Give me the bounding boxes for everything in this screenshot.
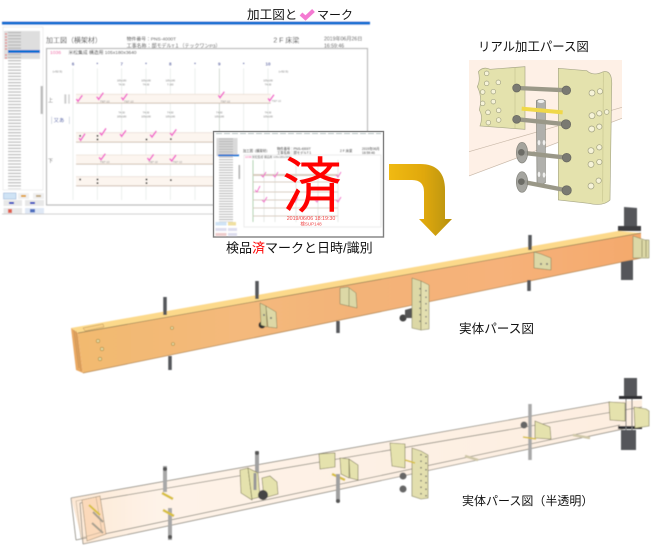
drawing header texts: 物件番号：PNS-4000T: [127, 35, 176, 42]
member drawing content: T4-30: [118, 84, 126, 87]
heading: processing drawing and check mark: [247, 8, 353, 22]
caption: inspected mark with date and ID: 検品済マークと日時/識別: [226, 240, 373, 256]
left bracket plate: [477, 67, 525, 129]
bracket at post 1: [258, 303, 277, 328]
drawing header texts: 2019年06月26日: [324, 35, 362, 43]
long bracket with bolts: [400, 278, 429, 330]
panel: inspected drawing screenshot with red stamp: 米松集成 構造用 105x180x3640: [252, 155, 292, 159]
beam front face: [78, 233, 641, 373]
member drawing content: T90*-10: [221, 99, 231, 103]
member drawing content: 米松集成 構造用 105x180x3640: [68, 49, 137, 56]
member drawing content: 1036: [50, 50, 61, 56]
member drawing content: 上: [48, 97, 53, 104]
member drawing content: T90*-10: [100, 160, 110, 164]
panel: inspected drawing screenshot with red stamp: 加工図（横架材）: [243, 148, 269, 153]
panel: inspected drawing screenshot with red stamp: 16:59:46: [362, 151, 375, 155]
dark column stubs and end bracket: [618, 207, 649, 280]
panel: inspected drawing screenshot with red stamp: 2019年06月: [362, 146, 380, 151]
member drawing content: T4-30: [216, 111, 223, 114]
member drawing content: 又あ: [54, 117, 64, 124]
bracket holes: [480, 71, 609, 189]
right bracket plate: [558, 68, 612, 204]
end plate with pins: [76, 496, 106, 541]
tree list of members: [3, 27, 43, 190]
caption: translucent solid perspective: 実体パース図（半透明）: [462, 494, 593, 508]
caption: solid perspective: 実体パース図: [459, 321, 534, 336]
member drawing content: T4-30: [265, 111, 272, 114]
stamp: date and identifier: 2019/06/06 18:19:30: [287, 216, 335, 222]
stamp: red inspected character: 済: [282, 153, 342, 220]
member drawing content: T-100: [167, 84, 174, 87]
panel: solid perspective timber beam: [71, 207, 649, 373]
drawing header texts: [46, 35, 362, 49]
member drawing content: 下: [48, 158, 53, 164]
member drawing content: 6: [72, 62, 75, 67]
panel: inspected drawing screenshot with red stamp: 物件番号：PNS-4000T: [277, 146, 311, 151]
member drawing content: 105x180: [215, 115, 225, 118]
member drawing content: 105x180: [117, 115, 127, 118]
bolt heads and washers: [513, 84, 571, 195]
window title bar: [2, 22, 370, 25]
member drawing content: *: [194, 62, 196, 67]
heading: processing drawing and check mark: 加工図と: [247, 8, 297, 22]
member drawing content: (+52.5): [279, 70, 288, 74]
steel rods: [165, 235, 530, 370]
tool buttons: [4, 193, 44, 214]
panel: translucent perspective timber beam: [71, 378, 649, 544]
rod pair 1: [162, 466, 174, 540]
bolts: [517, 88, 567, 190]
member drawing content: *: [145, 62, 147, 67]
member drawing content: T4-30: [167, 111, 174, 114]
beam end laminations: [71, 328, 83, 373]
member drawing content: 8: [169, 62, 172, 67]
member drawing content: 7: [120, 62, 123, 67]
heading: processing drawing and check mark: マーク: [317, 8, 353, 22]
member drawing content: 9: [218, 62, 221, 67]
timber bands: [76, 94, 271, 186]
panel: inspected drawing screenshot with red stamp: 2 F 床梁: [340, 148, 353, 153]
panel: main processing drawing screenshot: [2, 21, 370, 214]
bracket near right: [534, 252, 551, 270]
member drawing content: [48, 49, 288, 200]
member drawing content: *: [96, 62, 98, 67]
member drawing content: 105x180: [166, 115, 176, 118]
drawing header texts: 16:59:46: [324, 43, 344, 49]
member drawing content: T4-30: [143, 111, 150, 114]
member drawing content: 105x180: [263, 80, 273, 83]
member drawing content: T4-30: [118, 111, 126, 114]
member drawing content: T90*-10: [272, 99, 282, 103]
caption: real processing perspective: リアル加工パース図: [478, 40, 589, 54]
end posts and brackets: [609, 378, 649, 450]
bracket group 3 long plate: [390, 443, 428, 499]
check marks: [76, 92, 274, 161]
drift pin holes: [96, 326, 174, 361]
beam top face: [71, 231, 641, 333]
drawing header texts: 工事名称：邸モデルT１（テックワンP3）: [127, 42, 221, 49]
drawing header texts: 加工図（横架材）: [46, 36, 102, 45]
member drawing content: 10: [265, 62, 271, 67]
window status line: [2, 213, 370, 215]
icon: pink check mark: [301, 10, 314, 18]
member drawing content: (+52.5): [53, 70, 62, 74]
drawing frame: [46, 48, 368, 205]
drawing header texts: 2 F 床梁: [273, 36, 299, 45]
panel: real processing perspective view: [469, 60, 622, 204]
member drawing content: 105x180: [263, 115, 273, 118]
panel: inspected drawing screenshot with red stamp: 検SUP148: [300, 220, 322, 228]
bracket group 2 and rod: [319, 453, 358, 503]
arrow: curved gold arrow: [389, 164, 452, 236]
member drawing content: T90*-10: [124, 99, 134, 103]
member drawing content: 105x180: [117, 80, 127, 83]
bracket group 1: [240, 451, 278, 500]
member drawing content: T4-30: [143, 84, 150, 87]
panel: inspected drawing screenshot with red stamp: 工事名称：邸モデルT１: [277, 150, 312, 155]
member drawing content: T90*-10: [148, 160, 158, 164]
panel: inspected drawing screenshot with red stamp: 1036: [245, 155, 252, 159]
panel: inspected drawing screenshot with red stamp: [214, 132, 384, 237]
vertical drift pin: [536, 99, 545, 184]
small hardware on underside: [465, 435, 590, 460]
member drawing content: 105x180: [166, 80, 176, 83]
member drawing content: T4-30: [265, 84, 272, 87]
bracket at post 2: [340, 287, 357, 308]
member drawing content: T90*-10: [173, 160, 183, 164]
translucent beam body: [71, 400, 642, 544]
member drawing content: 105x180: [141, 115, 151, 118]
member drawing content: T90*-10: [100, 99, 110, 103]
bracket group 4 with rod: [520, 404, 551, 460]
member drawing content: 105x180: [141, 80, 151, 83]
member drawing content: *: [243, 62, 245, 67]
translucent timber background: [469, 60, 622, 176]
